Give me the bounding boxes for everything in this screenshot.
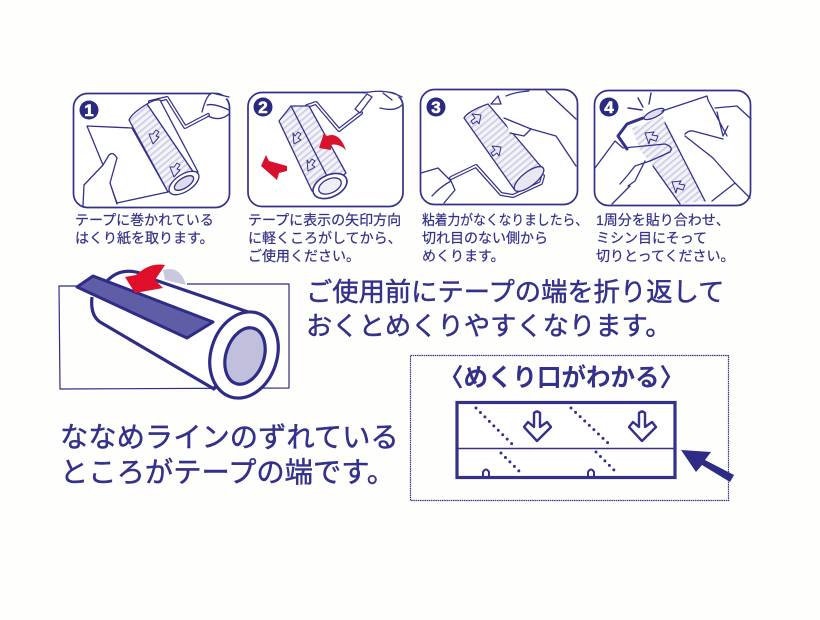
caption: step 3: めくります。 (422, 248, 505, 264)
panel: step 2 (248, 91, 403, 206)
caption: step 1: テープに巻かれている (75, 212, 214, 228)
dotted diagonal lines (476, 408, 616, 472)
illustration: roller (451, 104, 547, 196)
roller end (199, 303, 289, 407)
panel: step 3 (420, 90, 578, 204)
icon: number 3 (426, 98, 446, 117)
folded tape strip (77, 276, 213, 338)
panel: step 4 (594, 90, 751, 206)
illustration: hand on handle (355, 91, 402, 113)
heading: fold tape tip: おくとめくりやすくなります。 (306, 311, 672, 341)
caption: step 3: 粘着力がなくなりましたら、 (422, 212, 588, 228)
illustration: handle and cap (618, 118, 643, 149)
caption: step 2: に軽くころがしてから、 (248, 230, 402, 246)
perforation notches (483, 470, 594, 477)
icon: pointer arrow (681, 450, 734, 482)
illustration: snap marks (628, 93, 651, 110)
caption: step 3: 切れ目のない側から (422, 230, 548, 246)
text: diagonal line tip: ところがテープの端です。 (60, 456, 395, 488)
illustration: roller (129, 98, 208, 199)
icon: red left arrow (261, 155, 287, 180)
illustration: lower hand (421, 168, 455, 203)
caption: step 2: ご使用ください。 (248, 248, 360, 264)
roller body (92, 271, 254, 389)
caption: step 4: ミシン目にそって (596, 230, 707, 246)
roller core (218, 323, 272, 389)
icon: number 1: 1 (84, 101, 94, 120)
icon: number 2 (254, 98, 272, 117)
heading: fold tape tip: ご使用前にテープの端を折り返して (306, 277, 724, 307)
panel: step 1 (74, 93, 230, 208)
diagram: tape strip (457, 402, 675, 478)
illustration: roller tape (632, 116, 705, 204)
illustration: roller (279, 103, 361, 204)
icon: number 4 (600, 98, 618, 117)
panel: how to find the tape end (410, 356, 734, 500)
icon: number 3: 3 (431, 98, 441, 117)
icon: number 1 (80, 100, 98, 120)
caption: step 4: 1周分を貼り合わせ、 (596, 212, 730, 228)
illustration: roller with folded tape (59, 264, 289, 407)
icon: number 2: 2 (258, 98, 268, 117)
icon: number 4: 4 (604, 98, 614, 117)
illustration: peeling paper (87, 126, 168, 203)
icon: red curved arrow (319, 133, 346, 150)
illustration: paper sheet and right hand (662, 96, 751, 201)
text: diagonal line tip: ななめラインのずれている (60, 421, 399, 453)
illustration: upper hand peeling (491, 91, 576, 166)
caption: step 2: テープに表示の矢印方向 (248, 212, 401, 228)
icon: red fold arrow (125, 264, 165, 293)
illustration: hand holding paper (83, 154, 117, 206)
illustration: hand on handle (202, 93, 229, 119)
tape peel (163, 269, 186, 285)
heading: finding the edge: 〈めくり口がわかる〉 (439, 363, 684, 392)
caption: step 4: 切りとってください。 (596, 248, 734, 264)
caption: step 1: はくり紙を取ります。 (75, 230, 214, 246)
icon: down arrows (524, 412, 656, 441)
illustration: left hand (595, 141, 671, 204)
